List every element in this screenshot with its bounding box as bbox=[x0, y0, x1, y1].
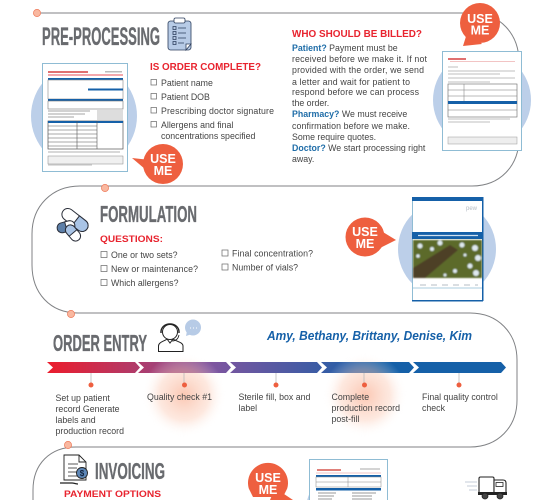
panel: billing letter form bbox=[433, 51, 531, 150]
step text: set up patient record: production record bbox=[56, 426, 124, 436]
step text: complete production record bbox=[332, 392, 400, 424]
text block: billing explanation: away. bbox=[292, 154, 314, 164]
checklist: order complete: Patient DOB bbox=[161, 92, 210, 102]
step text: complete production record: Complete bbox=[332, 392, 369, 402]
checklist: order complete: concentrations specified bbox=[161, 131, 255, 141]
callout: use me (invoicing): ME bbox=[259, 483, 277, 497]
connector dot: invoicing top bbox=[64, 441, 72, 449]
text block: billing explanation: received before we make it. If not bbox=[292, 54, 428, 64]
checklist: order complete: Allergens and final bbox=[161, 120, 233, 130]
icon: invoice with dollar coin bbox=[60, 455, 88, 484]
icon: clipboard checklist bbox=[168, 18, 191, 50]
heading: is order complete: IS ORDER COMPLETE? bbox=[150, 62, 261, 73]
step text: set up patient record: labels and bbox=[56, 415, 96, 425]
text block: billing explanation: Some require quotes. bbox=[292, 132, 376, 142]
text block: billing explanation: respond before we can process bbox=[292, 87, 420, 97]
checklist: order complete: Prescribing doctor signature bbox=[161, 106, 274, 116]
checklist: questions left: New or maintenance? bbox=[111, 264, 198, 274]
highlight glow: production record bbox=[323, 353, 407, 437]
checklist: order complete bbox=[151, 78, 274, 141]
callout: use me (order form): USE bbox=[150, 152, 176, 166]
step text: complete production record: post-fill bbox=[332, 414, 359, 424]
callout: use me (invoicing) bbox=[248, 463, 293, 500]
icon: delivery truck bbox=[465, 477, 507, 499]
callout: use me (order form): ME bbox=[154, 164, 172, 178]
callout: use me (formulation): ME bbox=[356, 237, 374, 251]
text: staff names: Amy, Bethany, Brittany, Denise, Kim bbox=[266, 329, 472, 343]
checklist: order complete: Patient name bbox=[161, 78, 213, 88]
callout: use me (invoicing): USE bbox=[255, 471, 281, 485]
panel: report cover document: pew bbox=[466, 206, 478, 212]
callout: use me (billing): USE bbox=[467, 12, 493, 26]
text block: billing explanation: Doctor? We start processing right bbox=[292, 143, 426, 153]
callout: use me (formulation): USE bbox=[352, 225, 378, 239]
process markers bbox=[88, 373, 462, 388]
step text: quality check: Quality check #1 bbox=[147, 392, 212, 402]
connector dot: formulation top bbox=[101, 184, 109, 192]
checklist: questions left: Which allergens? bbox=[111, 278, 179, 288]
heading: order entry: ORDER ENTRY bbox=[53, 330, 147, 356]
text block: billing explanation: provided with the order, we send bbox=[292, 65, 424, 75]
text block: billing explanation: confirmation before we make. bbox=[292, 121, 410, 131]
step text: set up patient record bbox=[56, 393, 124, 436]
connector dot: top bbox=[33, 9, 41, 17]
process arrow bar bbox=[47, 362, 506, 373]
text block: billing explanation bbox=[292, 43, 428, 164]
step text: sterile fill: label bbox=[238, 403, 257, 413]
text block: billing explanation: the order. bbox=[292, 98, 329, 108]
icon: capsules bbox=[56, 206, 91, 243]
connector dot: order entry top bbox=[67, 310, 75, 318]
step text: final quality control: Final quality control bbox=[422, 392, 498, 402]
checklist: questions right: Final concentration? bbox=[232, 248, 313, 258]
step text: final quality control bbox=[422, 392, 498, 413]
checklist: questions left: One or two sets? bbox=[111, 250, 178, 260]
callout: use me (billing): ME bbox=[471, 24, 489, 38]
heading: who should be billed: WHO SHOULD BE BILLED? bbox=[292, 28, 422, 40]
callout: use me (formulation) bbox=[346, 218, 396, 256]
text block: billing explanation: Patient? Payment must be bbox=[292, 43, 398, 53]
icon: invoice with dollar coin: $ bbox=[80, 469, 85, 478]
heading: pre-processing: PRE-PROCESSING bbox=[42, 23, 160, 51]
callout: use me (billing) bbox=[460, 3, 500, 46]
panel: invoice form document bbox=[307, 460, 388, 500]
text block: billing explanation: a letter and wait for patient to bbox=[292, 77, 410, 87]
step text: final quality control: check bbox=[422, 403, 446, 413]
checklist: questions right: Number of vials? bbox=[232, 262, 298, 272]
step text: set up patient record: Set up patient bbox=[56, 393, 110, 403]
highlight glow: quality check bbox=[142, 353, 226, 437]
checklist: questions left bbox=[101, 250, 198, 288]
step text: sterile fill bbox=[238, 392, 310, 413]
step text: set up patient record: record Generate bbox=[56, 404, 120, 414]
step text: complete production record: production record bbox=[332, 403, 400, 413]
heading: questions: QUESTIONS: bbox=[100, 234, 163, 245]
heading: payment options: PAYMENT OPTIONS bbox=[64, 489, 161, 500]
heading: invoicing: INVOICING bbox=[95, 458, 165, 484]
checklist: questions right bbox=[222, 248, 313, 272]
callout: use me (order form) bbox=[132, 144, 183, 184]
icon: call center agent with speech bubble bbox=[158, 320, 201, 352]
heading: formulation: FORMULATION bbox=[100, 201, 197, 227]
step text: sterile fill: Sterile fill, box and bbox=[238, 392, 310, 402]
panel: report cover document bbox=[398, 197, 496, 302]
text block: billing explanation: Pharmacy? We must receive bbox=[292, 109, 407, 119]
panel: patient order form bbox=[31, 63, 137, 172]
